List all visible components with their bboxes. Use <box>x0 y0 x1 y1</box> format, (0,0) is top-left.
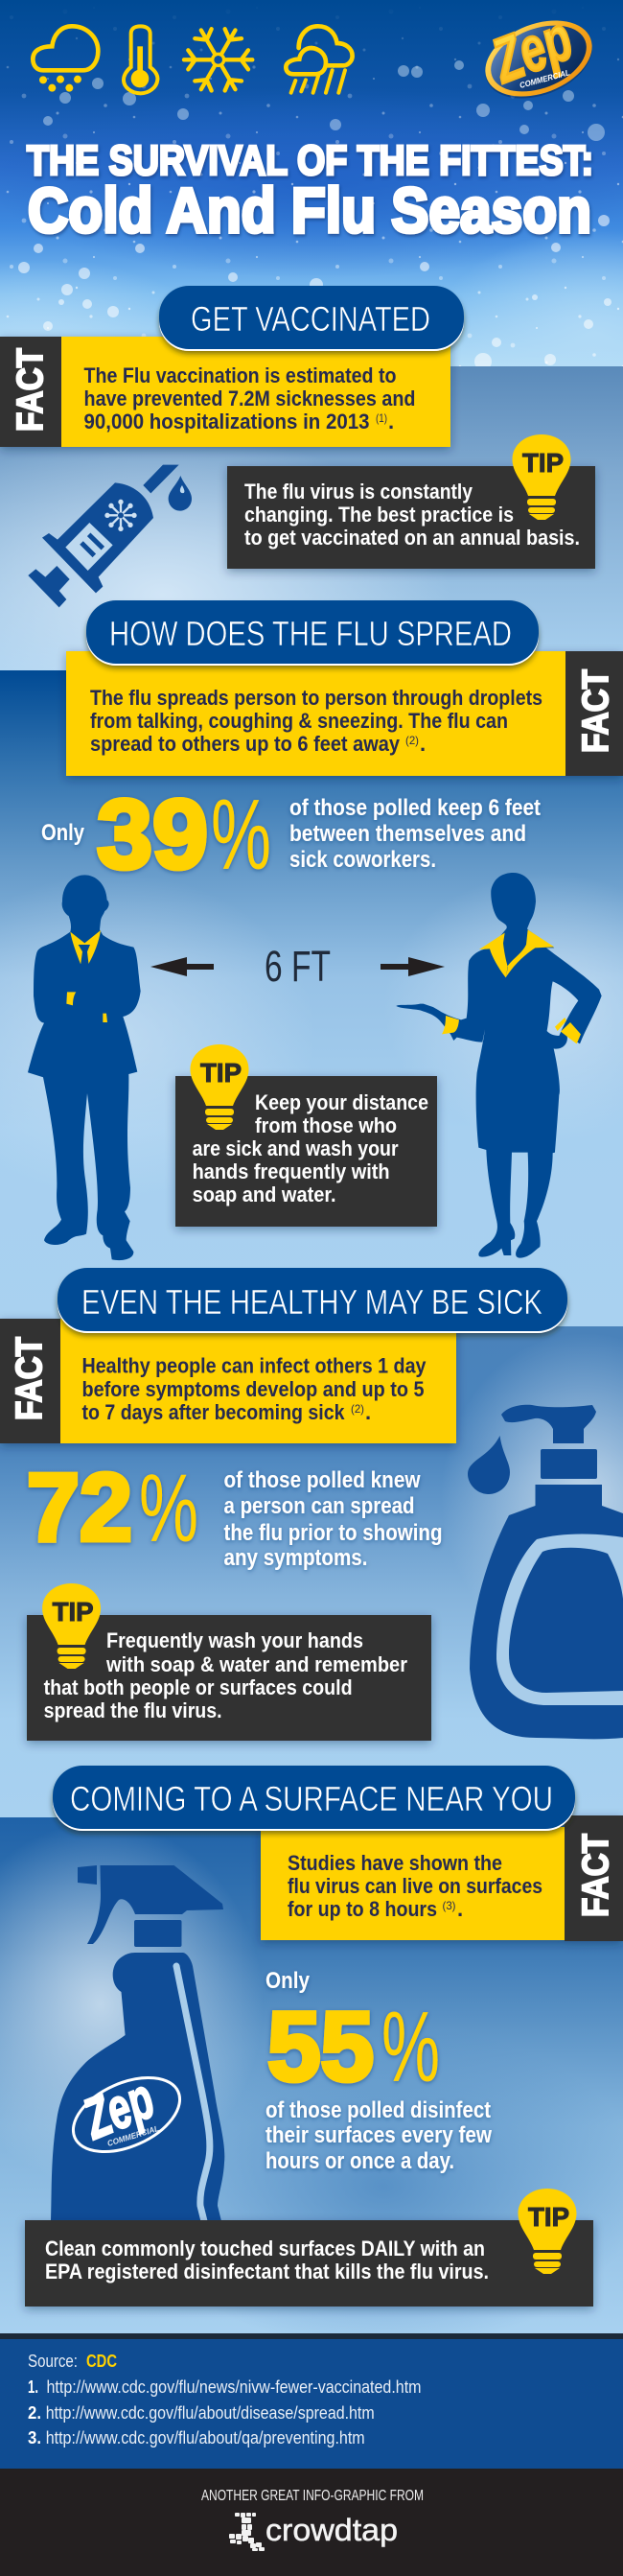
sources panel: 2. <box>28 2403 41 2423</box>
icon: tip bulb <box>512 434 571 520</box>
arrow: right <box>381 957 445 976</box>
stat: 72 percent: any symptoms. <box>224 1545 368 1571</box>
fact panel: vaccination: FACT <box>11 348 51 432</box>
fact panel: vaccination <box>0 337 450 447</box>
fact panel: vaccination: . <box>388 410 394 433</box>
tip panel: annual vaccination: changing. The best practice is <box>244 503 514 527</box>
icon: tip bulb: TIP <box>528 2202 569 2232</box>
icon: soap pump bottle <box>468 1405 623 1739</box>
stat: 55 percent: Only <box>265 1968 310 1994</box>
footer credit panel: crowdtap <box>265 2513 398 2547</box>
icon: crowdtap faucet <box>229 2513 265 2551</box>
tip panel: keep your distance: soap and water. <box>193 1183 336 1206</box>
stat: 72 percent: 72 <box>27 1454 132 1561</box>
stat: 39 percent: % <box>211 780 271 891</box>
arrow: left <box>150 957 214 976</box>
sources panel: Source: <box>28 2351 78 2371</box>
fact panel: how flu spreads: FACT <box>576 669 616 753</box>
fact panel: healthy people <box>0 1319 456 1443</box>
figure: woman silhouette <box>396 873 602 1258</box>
stat: 39 percent: between themselves and <box>289 821 526 847</box>
fact panel: healthy people: FACT <box>10 1337 50 1420</box>
fact panel: vaccination: The Flu vaccination is estimated to <box>84 363 397 387</box>
stat: 39 percent <box>41 780 541 891</box>
icon: tip bulb <box>518 2189 577 2274</box>
fact panel: healthy people: (2) <box>351 1402 364 1416</box>
tip panel: keep your distance: Keep your distance <box>255 1090 428 1114</box>
fact panel: healthy people: Healthy people can infect others 1 day <box>82 1354 427 1377</box>
fact panel: how flu spreads: (2) <box>405 734 419 747</box>
logo: Zep Commercial: COMMERCIAL <box>519 67 571 90</box>
tip panel: wash your hands <box>27 1583 431 1741</box>
logo: Zep on bottle: COMMERCIAL <box>106 2123 160 2148</box>
icon: tip bulb: TIP <box>53 1597 94 1627</box>
fact panel: how flu spreads <box>66 651 623 776</box>
heading pill: get vaccinated: GET VACCINATED <box>191 299 430 339</box>
stat: 55 percent: hours or once a day. <box>265 2148 454 2174</box>
sources panel: CDC <box>86 2352 117 2371</box>
icon: spray bottle <box>51 1865 224 2221</box>
logo: Zep on bottle: Zep <box>74 2066 163 2152</box>
stat: 55 percent: % <box>381 1992 440 2103</box>
stat: 39 percent: of those polled keep 6 feet <box>289 795 541 821</box>
tip panel: wash your hands: Frequently wash your hands <box>106 1628 363 1652</box>
fact panel: vaccination: (1) <box>376 411 387 425</box>
fact panel: how flu spreads: spread to others up to 6 feet away <box>90 732 401 756</box>
icon: tip bulb <box>42 1583 101 1669</box>
stat: 55 percent: of those polled disinfect <box>265 2097 491 2123</box>
fact panel: surface survival <box>261 1815 623 1941</box>
stat: 72 percent <box>27 1454 443 1571</box>
tip panel: wash your hands: spread the flu virus. <box>44 1698 222 1722</box>
sources panel: 1. <box>28 2377 38 2397</box>
heading pill: even the healthy may be sick <box>58 1268 567 1333</box>
figure: man silhouette <box>28 875 141 1260</box>
icon: snow cloud <box>33 26 98 92</box>
fact panel: surface survival: for up to 8 hours <box>288 1897 437 1921</box>
fact panel: vaccination: have prevented 7.2M sicknesses and <box>84 386 416 410</box>
sources panel: http://www.cdc.gov/flu/about/qa/preventing.htm <box>46 2427 365 2447</box>
stat: 72 percent: % <box>139 1455 198 1562</box>
fact panel: surface survival: (3) <box>443 1899 456 1912</box>
hero header <box>0 0 623 366</box>
icon: snowflake <box>184 25 252 94</box>
footer credit panel <box>0 2469 623 2576</box>
tip panel: clean surfaces <box>25 2189 593 2307</box>
tip panel: annual vaccination: to get vaccinated on an annual basis. <box>244 526 580 550</box>
fact panel: surface survival: . <box>457 1897 463 1921</box>
fact panel: surface survival: FACT <box>576 1834 616 1917</box>
logo: Zep on bottle <box>62 2063 191 2166</box>
label: 6 FT distance with arrows: 6 FT <box>265 942 331 991</box>
stat: 39 percent: Only <box>41 820 84 846</box>
stat: 72 percent: a person can spread <box>224 1493 414 1519</box>
tip panel: clean surfaces: Clean commonly touched surfaces DAILY with an <box>45 2236 485 2260</box>
icon: tip bulb: TIP <box>522 448 564 478</box>
tip panel: annual vaccination: The flu virus is constantly <box>244 480 473 503</box>
icon: rain clouds <box>286 26 353 93</box>
tip panel: keep your distance <box>175 1044 437 1227</box>
fact panel: surface survival: Studies have shown the <box>288 1851 502 1875</box>
stat: 55 percent: their surfaces every few <box>265 2122 493 2148</box>
tip panel: clean surfaces: EPA registered disinfectant that kills the flu virus. <box>45 2260 489 2283</box>
fact panel: how flu spreads: . <box>420 732 426 756</box>
title <box>27 137 593 246</box>
heading pill: how does the flu spread <box>86 600 539 666</box>
fact panel: healthy people: before symptoms develop and up to 5 <box>82 1377 424 1401</box>
fact panel: how flu spreads: from talking, coughing & sneezing. The flu can <box>90 709 508 733</box>
stat: 39 percent: sick coworkers. <box>289 847 436 873</box>
icon: syringe <box>28 465 192 607</box>
stat: 72 percent: of those polled knew <box>224 1467 421 1493</box>
hero snow background <box>0 0 623 366</box>
stat: 39 percent: 39 <box>97 780 208 889</box>
sources panel: http://www.cdc.gov/flu/about/disease/spread.htm <box>46 2402 375 2423</box>
sources panel: http://www.cdc.gov/flu/news/nivw-fewer-vaccinated.htm <box>46 2377 422 2397</box>
heading pill: how does the flu spread: HOW DOES THE FLU SPREAD <box>109 614 512 653</box>
tip panel: wash your hands: with soap & water and remember <box>105 1652 407 1676</box>
sources panel <box>0 2333 623 2469</box>
heading pill: coming to a surface near you <box>53 1766 575 1831</box>
fact panel: how flu spreads: The flu spreads person to person through droplets <box>90 686 542 710</box>
label: 6 FT distance with arrows <box>150 942 445 991</box>
heading pill: get vaccinated <box>159 286 464 351</box>
fact panel: surface survival: flu virus can live on surfaces <box>288 1874 542 1898</box>
tip panel: wash your hands: that both people or surfaces could <box>44 1675 353 1699</box>
icon: tip bulb: TIP <box>200 1058 242 1088</box>
stat: 55 percent <box>265 1968 493 2174</box>
fact panel: vaccination: 90,000 hospitalizations in 2013 <box>84 410 370 433</box>
fact panel: healthy people: . <box>365 1400 371 1424</box>
tip panel: keep your distance: are sick and wash your <box>193 1136 399 1160</box>
icon: tip bulb <box>190 1044 249 1130</box>
panel backgrounds <box>0 366 623 2350</box>
fact panel: healthy people: to 7 days after becoming sick <box>82 1400 345 1424</box>
sources panel: 3. <box>28 2428 41 2447</box>
stat: 72 percent: the flu prior to showing <box>224 1520 443 1546</box>
footer credit panel: ANOTHER GREAT INFO-GRAPHIC FROM <box>201 2488 424 2504</box>
tip panel: annual vaccination <box>227 434 595 569</box>
icon: thermometer <box>124 26 157 93</box>
stat: 55 percent: 55 <box>267 1992 374 2101</box>
tip panel: keep your distance: from those who <box>255 1113 397 1137</box>
tip panel: keep your distance: hands frequently with <box>193 1159 390 1183</box>
